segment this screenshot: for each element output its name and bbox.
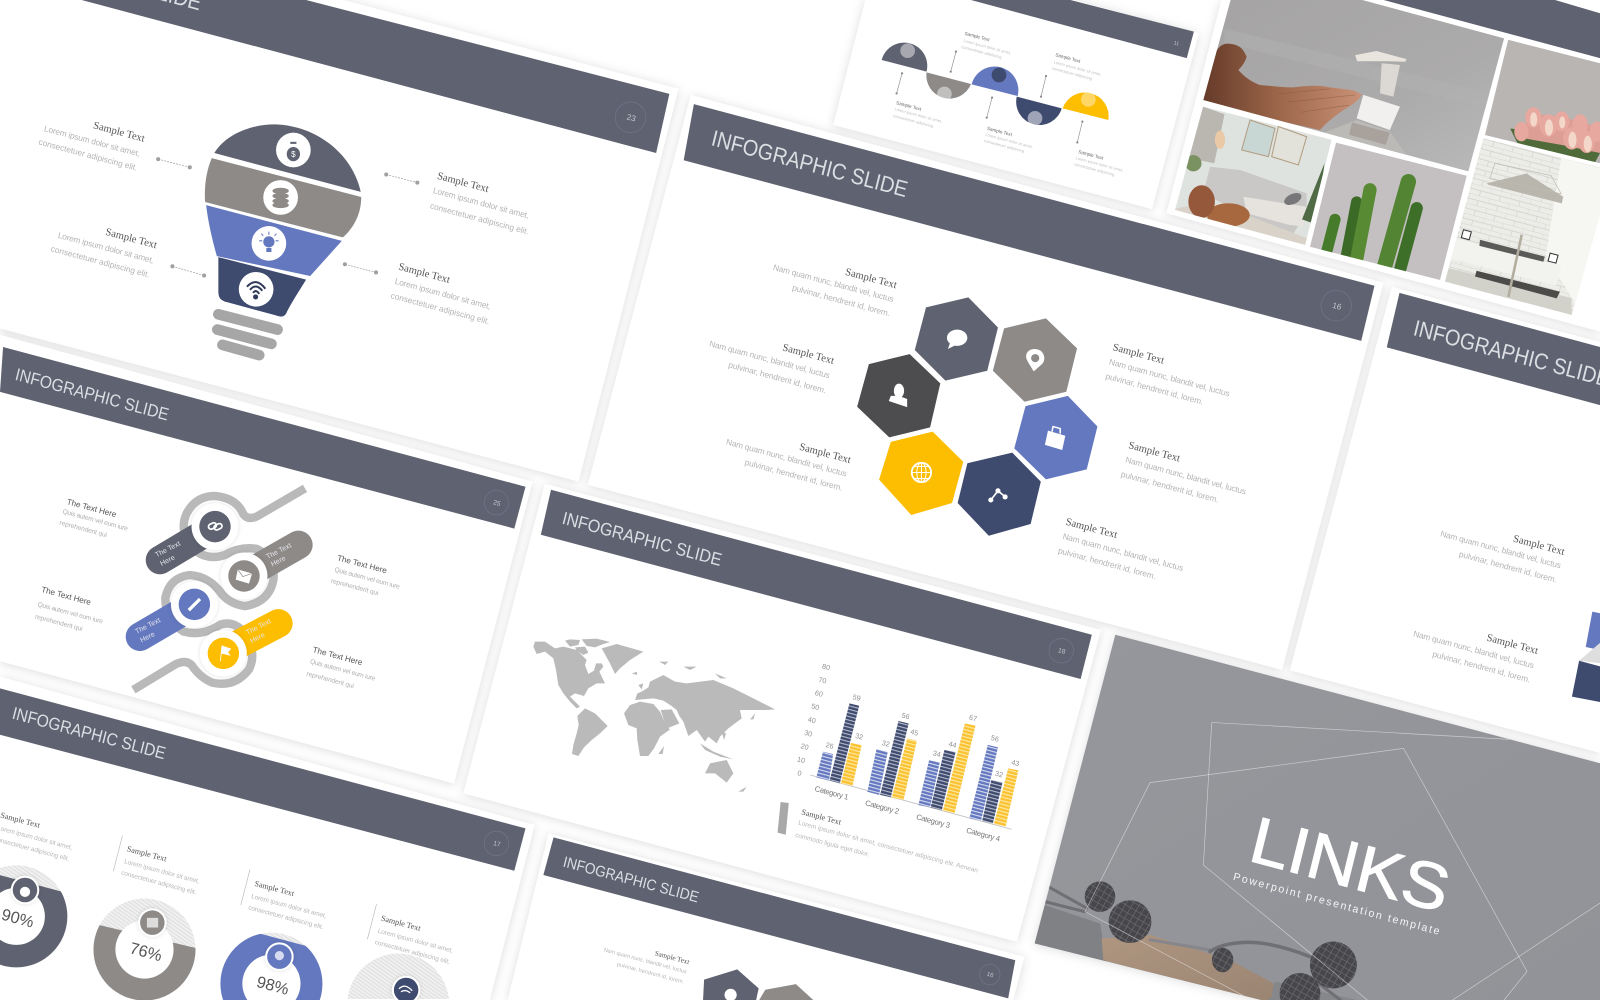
- text blocks: wave slide: consectetuer adipiscing: [1051, 66, 1093, 81]
- value labels: 43: [1010, 758, 1020, 768]
- panel: top right slide band: [1384, 0, 1600, 58]
- text block: donut 3: Sample Text: [254, 879, 296, 898]
- donut: 76%: 76%: [128, 939, 164, 965]
- bars: category 3: [918, 723, 976, 813]
- value labels: 67: [968, 714, 978, 723]
- text blocks: wave slide: Sample Text: [896, 100, 922, 112]
- text block: path lower right: reprehenderit qui: [306, 671, 355, 690]
- text block: hexagon right 3: [1057, 517, 1184, 581]
- header band: right partial slide: [1387, 293, 1600, 405]
- title: path slide: INFOGRAPHIC SLIDE: [13, 364, 171, 424]
- text blocks: wave slide: consectetuer adipiscing: [961, 44, 1002, 60]
- bar chart: [796, 663, 1020, 844]
- text block: donut 2: Sample Text: [126, 844, 168, 864]
- hexagon: share: [958, 453, 1041, 536]
- photo: table and pine cones: [1031, 881, 1357, 1000]
- category labels: Category 3: [915, 812, 951, 830]
- hexagon: globe: [879, 432, 963, 515]
- panel: wave slide: [833, 0, 1199, 209]
- axis labels: 60: [814, 689, 824, 699]
- axis labels: 40: [807, 716, 817, 725]
- axis labels: 50: [810, 702, 820, 712]
- pill text: The Text: [154, 540, 182, 559]
- donut: 98%: [220, 933, 322, 1000]
- text blocks: wave slide: Lorem ipsum dolor sit amet,: [894, 106, 943, 124]
- icon: wifi: [239, 272, 273, 307]
- axis labels: 10: [796, 755, 806, 765]
- text block: hexagon left 2: Nam quam nunc, blandit vel, luctus: [708, 338, 831, 380]
- axis labels: 70: [818, 676, 827, 686]
- panel: right partial slide: [1290, 287, 1600, 753]
- pills: labels: [140, 531, 298, 649]
- panel: bottom center slide: [508, 833, 1024, 1000]
- text block: hexagon right 1: [1105, 342, 1231, 407]
- text block: chart note: commodo ligula eget dolor.: [794, 832, 870, 859]
- header band: donut slide: [0, 688, 526, 871]
- text block: hexagon right 2: [1120, 440, 1247, 505]
- text blocks: wave slide: Sample Text: [1078, 149, 1105, 161]
- text block: hexagon right 3: pulvinar, hendrerit id, lorem.: [1057, 545, 1157, 581]
- icon: database: [263, 180, 298, 215]
- text block: bottom center: Sample Text: [654, 949, 690, 966]
- text block: path upper left: The Text Here: [66, 497, 118, 519]
- text block: donut 2: consectetuer adipiscing elit.: [120, 870, 197, 897]
- page number: 16: 16: [986, 971, 995, 980]
- text block: donut 3: consectetuer adipiscing elit.: [247, 904, 324, 931]
- panel: title slide LINKS: [1031, 635, 1600, 1000]
- text block: bulb upper right: Lorem ipsum dolor sit amet,: [432, 185, 530, 220]
- value labels: 59: [852, 693, 861, 703]
- title: map slide: INFOGRAPHIC SLIDE: [560, 508, 724, 570]
- text block: bottom center: pulvinar, hendrerit id, lorem.: [616, 962, 685, 986]
- text block: hexagon left 3: Nam quam nunc, blandit vel, luctus: [725, 437, 848, 478]
- hexagon: briefcase: [1014, 396, 1097, 479]
- text block: bulb lower left: Lorem ipsum dolor sit amet,: [57, 230, 155, 265]
- title: bottom center slide: INFOGRAPHIC SLIDE: [561, 854, 700, 906]
- text block: chart note: Lorem ipsum dolor sit amet, consectetuer adipiscing elit. Aenean: [797, 820, 979, 875]
- bars: category 4: [969, 745, 1018, 827]
- text block: bulb upper right: consectetuer adipiscing elit.: [429, 200, 530, 237]
- text block: hexagon left 2: pulvinar, hendrerit id, lorem.: [727, 359, 827, 395]
- text block: bulb upper left: consectetuer adipiscing elit.: [38, 137, 139, 173]
- pill text: Here: [139, 630, 156, 644]
- text block: path lower left: Quis autem vel eum iure: [37, 601, 104, 626]
- text blocks: wave slide: consectetuer adipiscing: [1074, 161, 1115, 177]
- text block: path lower left: reprehenderit qui: [34, 614, 84, 633]
- category labels: Category 4: [965, 826, 1002, 844]
- text block: hexagon left 1: Nam quam nunc, blandit vel, luctus: [772, 262, 895, 304]
- icon: mail circle: [221, 553, 267, 599]
- gray accent bar: [778, 802, 789, 835]
- text block: hexagon right 2: pulvinar, hendrerit id, lorem.: [1120, 469, 1220, 505]
- donut: 90%: [0, 865, 67, 967]
- header band: wave slide: [971, 0, 1194, 58]
- text block: hexagon left 3: pulvinar, hendrerit id, lorem.: [744, 457, 844, 493]
- text blocks: wave slide: [893, 31, 1124, 177]
- text block: donut 3: [247, 879, 327, 931]
- text block: path lower right: [306, 645, 376, 690]
- category labels: Category 1: [814, 784, 849, 802]
- bars: category 1: [816, 703, 862, 786]
- photo: tulips: [1485, 40, 1600, 164]
- text block: path upper left: reprehenderit qui: [59, 520, 108, 539]
- text block: right upper: Nam quam nunc, blandit vel, luctus: [1439, 528, 1562, 570]
- donut: partial with wifi icon: [348, 954, 449, 1000]
- text block: donut 4: Lorem ipsum dolor sit amet,: [377, 928, 454, 955]
- axis labels: 80: [821, 663, 831, 672]
- text block: bulb lower right: Lorem ipsum dolor sit amet,: [394, 276, 492, 311]
- photo: living room sofa: [1175, 106, 1332, 245]
- text block: hexagon right 1: pulvinar, hendrerit id, lorem.: [1105, 371, 1205, 407]
- icon: lightbulb: [252, 226, 286, 261]
- subtitle: Powerpoint presentation template: [1232, 871, 1441, 938]
- text block: hexagon right 1: Sample Text: [1112, 342, 1165, 367]
- icon: money bag: $: [291, 150, 296, 159]
- value labels: 56: [901, 712, 910, 721]
- header band: path slide: [0, 347, 526, 529]
- hexagons: right edge: [1572, 612, 1600, 702]
- value labels: [825, 693, 1020, 780]
- value labels: 32: [994, 770, 1004, 780]
- header band: map slide: [541, 490, 1092, 679]
- pill text: The Text: [134, 616, 162, 636]
- photo: kitchen: [1445, 138, 1600, 315]
- text block: donut 2: Lorem ipsum dolor sit amet,: [123, 858, 200, 885]
- icon: flag circle: [200, 630, 247, 677]
- text block: hexagon right 1: Nam quam nunc, blandit vel, luctus: [1108, 357, 1231, 398]
- text block: hexagon left 1: pulvinar, hendrerit id, lorem.: [791, 282, 891, 318]
- page number: 18: 18: [1057, 647, 1066, 656]
- hexagon: chat: [915, 297, 998, 381]
- title: LINKS: LINKS: [1243, 803, 1457, 926]
- text block: hexagon right 3: Nam quam nunc, blandit vel, luctus: [1062, 531, 1184, 573]
- text block: path upper right: Quis autem vel eum iure: [334, 567, 401, 591]
- page number: 16: [980, 964, 1000, 985]
- page number: 18: [1049, 638, 1073, 663]
- text blocks: wave slide: Lorem ipsum dolor sit amet,: [985, 132, 1033, 149]
- text block: hexagon right 2: Sample Text: [1127, 440, 1181, 465]
- text block: donut 2: [120, 844, 200, 897]
- donut: 98%: 98%: [255, 973, 291, 999]
- value labels: 32: [881, 739, 891, 749]
- text block: bulb upper right: Sample Text: [436, 171, 490, 195]
- text block: bulb lower right: consectetuer adipiscing elit.: [390, 290, 491, 326]
- icon: money bag: [276, 133, 311, 167]
- bars: category 2: [867, 721, 917, 800]
- chart: winding path: [133, 488, 305, 690]
- axis labels: [796, 663, 831, 778]
- decorative pentagon outlines: [1085, 722, 1600, 1000]
- header band: bulb slide: [82, 0, 669, 153]
- panel: path slide: [0, 335, 533, 784]
- header band: bottom center slide: [543, 837, 1015, 998]
- value labels: 44: [948, 740, 957, 750]
- page number: 17: [484, 831, 509, 856]
- value labels: 32: [854, 732, 864, 742]
- text block: path lower right: Quis autem vel eum iure: [309, 658, 376, 683]
- text block: bulb lower left: [50, 227, 158, 279]
- text block: right lower: Sample Text: [1485, 633, 1539, 657]
- panel: donut slide: [0, 677, 535, 1000]
- page number: 16: [1321, 290, 1352, 321]
- text blocks: wave slide: Lorem ipsum dolor sit amet,: [963, 38, 1012, 55]
- donut: 90%: 90%: [0, 906, 36, 932]
- text block: hexagon left 3: Sample Text: [798, 442, 852, 466]
- text block: hexagon right 2: Nam quam nunc, blandit vel, luctus: [1125, 454, 1247, 496]
- chart: light bulb segments: [205, 124, 361, 355]
- text block: right lower: Nam quam nunc, blandit vel, luctus: [1412, 628, 1535, 670]
- value labels: 26: [825, 741, 834, 751]
- page number: 25: 25: [492, 499, 501, 508]
- text block: hexagon left 2: Sample Text: [781, 343, 835, 367]
- text blocks: wave slide: Sample Text: [1055, 52, 1082, 64]
- text block: donut 1: Sample Text: [0, 811, 42, 830]
- page number: 23: 23: [626, 112, 637, 124]
- panel: photo collage slide: [1166, 0, 1600, 332]
- text block: donut 4: [374, 914, 454, 966]
- connector lines: bulb slide: [156, 157, 419, 278]
- hexagons: bottom center: [703, 969, 813, 1000]
- hexagon: person: [857, 354, 940, 437]
- category labels: Category 2: [864, 798, 900, 816]
- header band: hexagon slide: [684, 104, 1374, 341]
- text blocks: wave slide: consectetuer adipiscing: [893, 113, 934, 129]
- text block: bulb lower left: Sample Text: [104, 227, 158, 251]
- text block: right lower: pulvinar, hendrerit id, lorem.: [1432, 649, 1532, 685]
- text blocks: wave slide: Sample Text: [986, 126, 1013, 137]
- text block: right upper: Sample Text: [1512, 534, 1566, 558]
- page number: 17: 17: [492, 840, 501, 849]
- hexagon: location pin: [993, 318, 1077, 402]
- title: donut slide: INFOGRAPHIC SLIDE: [10, 703, 168, 763]
- arrows: wave slide: [896, 51, 1083, 143]
- pill text: [134, 540, 293, 645]
- pill text: Here: [249, 631, 266, 645]
- category labels: [814, 784, 1002, 844]
- donut: 76%: [93, 898, 196, 1000]
- panel: bulb slide: [0, 0, 679, 482]
- pill text: Here: [270, 554, 287, 568]
- axis labels: 0: [797, 769, 802, 778]
- text block: donut 4: consectetuer adipiscing elit.: [374, 939, 451, 966]
- text block: chart note: Sample Text: [801, 807, 843, 827]
- text block: right upper: pulvinar, hendrerit id, lorem.: [1458, 549, 1558, 585]
- title: hexagon slide: INFOGRAPHIC SLIDE: [709, 125, 910, 202]
- pill text: The Text: [265, 541, 293, 561]
- text block: path upper left: [59, 497, 129, 539]
- pill text: The Text: [245, 617, 273, 637]
- text block: bulb upper left: Lorem ipsum dolor sit amet,: [43, 123, 141, 159]
- text block: path upper right: reprehenderit qui: [330, 578, 380, 597]
- text block: path lower left: The Text Here: [40, 585, 92, 607]
- photo: hand and pump bottle: [1203, 0, 1504, 172]
- value labels: 34: [932, 749, 942, 759]
- text block: bulb lower right: Sample Text: [397, 262, 451, 286]
- text blocks: wave slide: Sample Text: [964, 31, 991, 43]
- text block: bulb upper right: [429, 171, 530, 237]
- text block: path lower right: The Text Here: [312, 645, 364, 667]
- text block: bulb upper left: Sample Text: [92, 120, 146, 145]
- text block: hexagon right 3: Sample Text: [1065, 517, 1118, 541]
- photo: cactus: [1310, 142, 1467, 280]
- text block: path upper left: Quis autem vel eum iure: [62, 508, 129, 533]
- value labels: 56: [990, 734, 1000, 744]
- text block: hexagon left 1: Sample Text: [844, 267, 898, 291]
- panel: map and chart slide: [463, 484, 1101, 942]
- icon: pencil circle: [171, 581, 218, 628]
- chart: wave segments: [882, 43, 1109, 126]
- axis labels: 20: [800, 742, 809, 752]
- text block: bottom center: Nam quam nunc, blandit vel, luctus: [603, 947, 687, 975]
- text block: path upper right: [330, 553, 401, 597]
- page number: 16: 16: [1331, 301, 1343, 312]
- axis labels: 30: [803, 729, 813, 739]
- page number: 11: 11: [1173, 40, 1180, 48]
- text block: bulb lower right: [390, 262, 492, 326]
- world map: [533, 639, 775, 792]
- text block: donut 3: Lorem ipsum dolor sit amet,: [251, 893, 327, 920]
- text block: path upper right: The Text Here: [336, 553, 388, 575]
- text blocks: wave slide: consectetuer adipiscing: [983, 138, 1025, 154]
- panel: hexagon slide: [588, 95, 1384, 670]
- page number: 25: [484, 490, 509, 515]
- text block: donut 1: [0, 811, 73, 863]
- value labels: 45: [909, 728, 919, 738]
- pill text: Here: [159, 554, 176, 568]
- text block: path lower left: [34, 585, 104, 633]
- divider lines: [113, 836, 377, 939]
- text block: donut 4: Sample Text: [380, 914, 422, 933]
- text block: bulb lower left: consectetuer adipiscing elit.: [50, 243, 151, 279]
- text blocks: wave slide: Lorem ipsum dolor sit amet,: [1053, 59, 1102, 77]
- text block: bulb upper left: [38, 120, 146, 173]
- icon: link circle: [192, 503, 238, 550]
- page number: 23: [615, 102, 646, 133]
- text blocks: wave slide: Lorem ipsum dolor sit amet,: [1075, 155, 1124, 173]
